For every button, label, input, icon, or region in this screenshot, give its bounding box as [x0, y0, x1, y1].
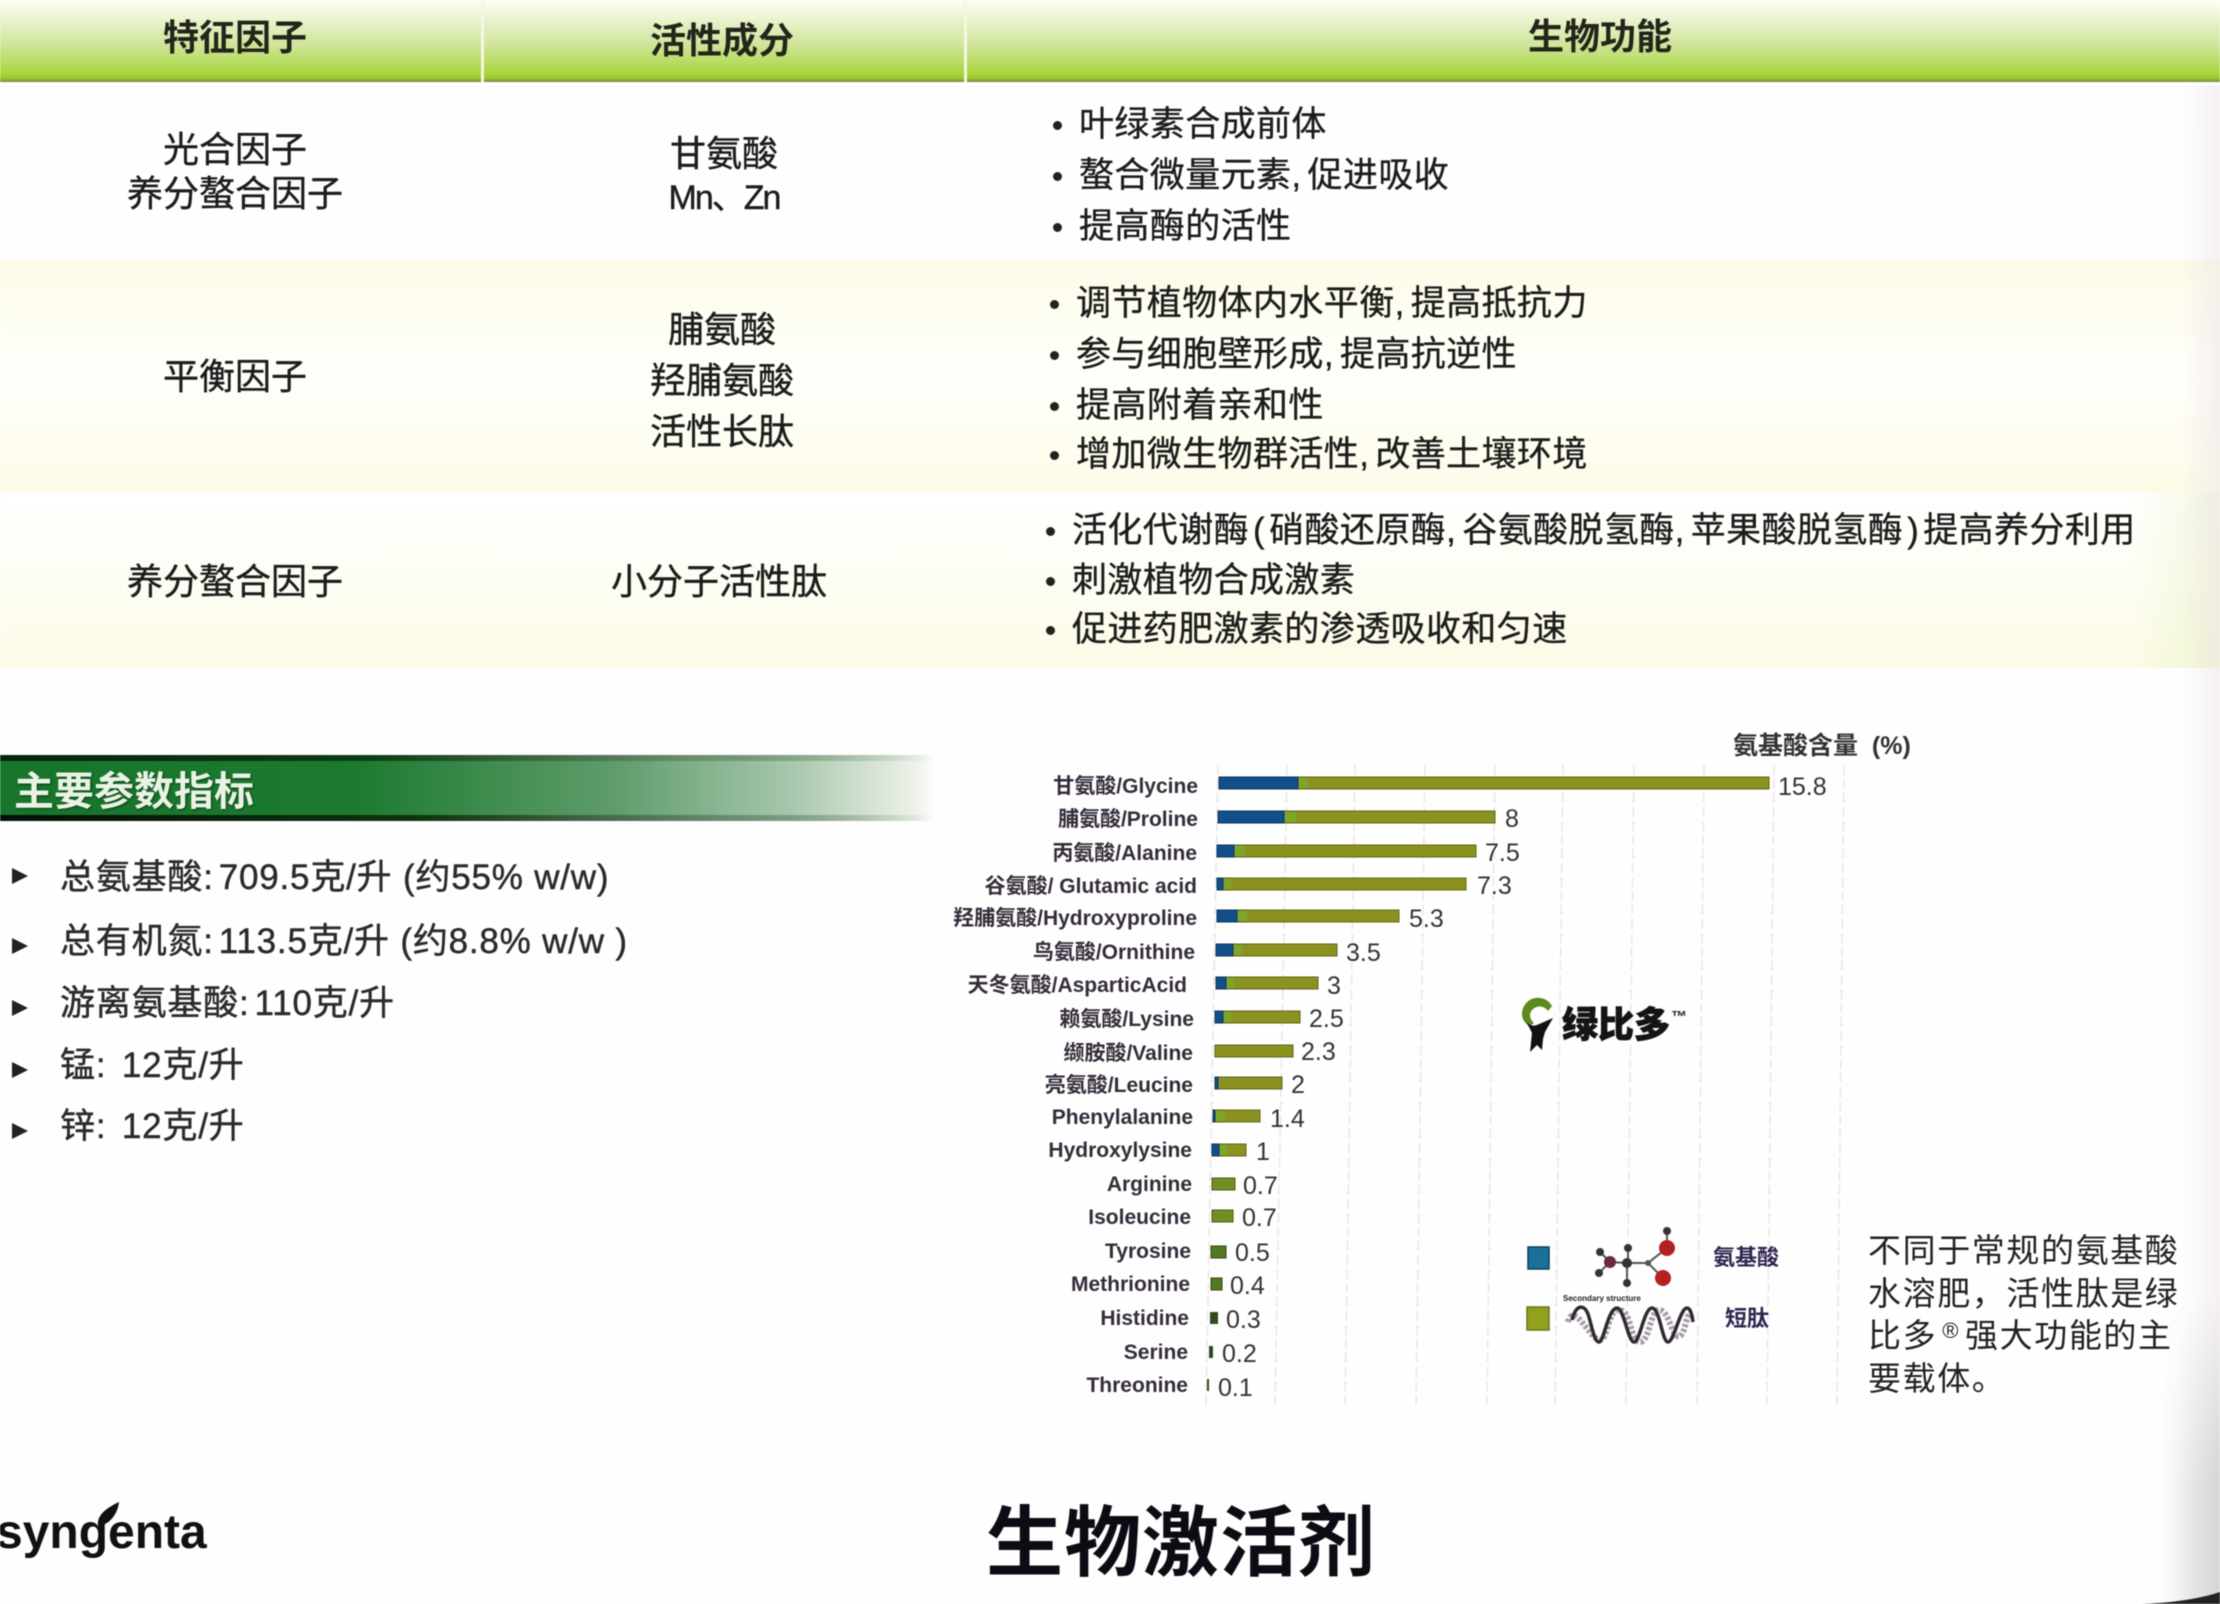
parameter: zinc: 锌: 12克/升	[60, 1107, 245, 1146]
row: Isoleucine	[1088, 1204, 1277, 1232]
row: Isoleucine: 0.7	[1242, 1204, 1277, 1232]
row: Arginine	[1107, 1172, 1278, 1200]
row 2 functions	[1049, 284, 1588, 474]
row: Proline: 脯氨酸/Proline	[1058, 807, 1198, 831]
row: Alanine: 丙氨酸/Alanine	[1052, 841, 1197, 865]
helix main strand	[1572, 1307, 1693, 1342]
row: Tyrosine	[1105, 1239, 1270, 1267]
row: Lysine: 2.5	[1309, 1005, 1344, 1033]
row: Threonine: 0.1	[1218, 1374, 1253, 1402]
row: Ornithine	[1033, 939, 1381, 967]
row: Hydroxyproline: 5.3	[1409, 905, 1444, 933]
key parameters list	[11, 858, 628, 1146]
row: Alanine	[1052, 839, 1520, 867]
note text block: 不同于常规的氨基酸	[1868, 1232, 2179, 1269]
row: Methrionine	[1071, 1272, 1265, 1300]
legend: amino acid	[1528, 1227, 1779, 1287]
row 2 background	[0, 260, 2220, 492]
note text block: 比多®强大功能的主	[1868, 1317, 2173, 1354]
logo icon: figure with green arc	[1522, 998, 1553, 1052]
parameter: total amino acids: 总氨基酸:709.5克/升 (约55% w/w)	[60, 858, 609, 897]
chart title: 氨基酸含量 (%)	[1733, 732, 1911, 760]
row: Phenylalanine	[1052, 1105, 1305, 1133]
row: Aspartic Acid	[968, 972, 1341, 1000]
brand logo	[1522, 998, 1687, 1052]
row: Arginine: 0.7	[1243, 1172, 1278, 1200]
row: Methrionine: 0.4	[1230, 1272, 1265, 1300]
logo text: 绿比多	[1562, 1004, 1670, 1045]
helix caption: Secondary structure	[1563, 1294, 1641, 1303]
row 2 factor: 平衡因子: 平衡因子	[163, 356, 307, 397]
row 3 ingredient: 小分子活性肽: 小分子活性肽	[611, 561, 827, 602]
row: Lysine	[1059, 1005, 1344, 1033]
row: Aspartic Acid: 3	[1327, 972, 1341, 1000]
label: 氨基酸: 氨基酸	[1713, 1245, 1779, 1270]
parameter: manganese: 锰: 12克/升	[60, 1046, 245, 1085]
row: Methrionine: Methrionine	[1071, 1273, 1190, 1296]
row: Proline	[1058, 805, 1519, 833]
row: Glycine	[1053, 773, 1827, 801]
page edge shadow	[2143, 85, 2220, 1604]
row: Phenylalanine: 1.4	[1270, 1105, 1305, 1133]
function bullet: 刺激植物合成激素	[1072, 561, 1355, 600]
row: Phenylalanine: Phenylalanine	[1052, 1106, 1193, 1129]
ingredient: 脯氨酸: 脯氨酸	[668, 309, 776, 350]
swatch: short peptide	[1527, 1307, 1549, 1330]
row: Hydroxyproline: 羟脯氨酸/Hydroxyproline	[953, 906, 1197, 930]
function bullet: 增加微生物群活性,改善土壤环境	[1076, 435, 1588, 474]
section heading bar: 主要参数指标	[0, 755, 935, 821]
row: Leucine: 2	[1291, 1071, 1305, 1099]
row: Threonine: Threonine	[1086, 1374, 1188, 1397]
function bullet: 活化代谢酶(硝酸还原酶,谷氨酸脱氢酶,苹果酸脱氢酶)提高养分利用	[1072, 511, 2136, 550]
function bullet: 参与细胞壁形成,提高抗逆性	[1076, 335, 1517, 374]
row: Proline: 8	[1505, 805, 1519, 833]
row 1 factor	[127, 129, 343, 214]
row: Lysine: 赖氨酸/Lysine	[1059, 1007, 1194, 1031]
factor: 养分螯合因子: 养分螯合因子	[127, 173, 343, 214]
helix secondary strand	[1568, 1310, 1692, 1342]
row: Glutamic acid	[985, 872, 1512, 900]
bottom corner grey shading	[2172, 1346, 2220, 1601]
note text block: 水溶肥，活性肽是绿	[1868, 1274, 2179, 1312]
row: Hydroxyproline	[953, 905, 1444, 933]
ingredient: Mn、Zn: Mn、Zn	[669, 179, 779, 217]
function bullet: 叶绿素合成前体	[1079, 105, 1327, 144]
row: Arginine: Arginine	[1107, 1173, 1192, 1196]
factor: 光合因子: 光合因子	[163, 129, 307, 170]
row: Histidine	[1100, 1306, 1261, 1334]
row: Tyrosine: Tyrosine	[1105, 1240, 1191, 1263]
ingredient: 甘氨酸: 甘氨酸	[670, 133, 778, 174]
function bullet: 促进药肥激素的渗透吸收和匀速	[1072, 610, 1568, 649]
row: Isoleucine: Isoleucine	[1088, 1206, 1191, 1229]
function bullet: 提高酶的活性	[1079, 207, 1291, 246]
row: Hydroxylysine: 1	[1256, 1138, 1270, 1166]
row 1 ingredient	[669, 133, 780, 217]
row: Hydroxylysine	[1048, 1138, 1270, 1166]
row: Ornithine: 鸟氨酸/Ornithine	[1033, 940, 1195, 964]
function bullet: 螯合微量元素,促进吸收	[1079, 156, 1449, 195]
right edge tint	[2180, 85, 2220, 1604]
icon: leaf on g	[97, 1502, 120, 1526]
swatch: amino acid	[1528, 1247, 1549, 1269]
row: Valine: 缬胺酸/Valine	[1063, 1042, 1193, 1065]
row: Alanine: 7.5	[1485, 839, 1520, 867]
main title: 生物激活剂	[986, 1501, 1376, 1587]
row: Ornithine: 3.5	[1346, 939, 1381, 967]
section heading bar: 主要参数指标: 主要参数指标	[14, 770, 254, 814]
header: 活性成分: 活性成分	[650, 20, 794, 61]
header divider 2	[964, 0, 967, 82]
legend: short peptide	[1527, 1294, 1769, 1342]
note text block	[1868, 1232, 2179, 1396]
row: Hydroxylysine: Hydroxylysine	[1048, 1139, 1192, 1162]
row: Glutamic acid: 7.3	[1477, 872, 1512, 900]
note text block: 要载体。	[1868, 1360, 2006, 1396]
row: Aspartic Acid: 天冬氨酸/AsparticAcid	[968, 973, 1187, 997]
row 2 ingredients	[650, 309, 794, 452]
row 3 factor: 养分螯合因子: 养分螯合因子	[127, 561, 343, 602]
header: 生物功能: 生物功能	[1528, 16, 1672, 57]
heading bar bottom edge	[0, 815, 935, 821]
row 3 background	[0, 492, 2220, 668]
label: 短肽: 短肽	[1725, 1306, 1769, 1331]
row: Leucine	[1045, 1071, 1305, 1099]
ingredient: 活性长肽: 活性长肽	[650, 411, 794, 452]
row: Threonine	[1086, 1374, 1253, 1402]
row 3 functions	[1045, 511, 2136, 649]
row: Tyrosine: 0.5	[1235, 1239, 1270, 1267]
heading bar top edge	[0, 755, 935, 761]
parameter: free amino acids: 游离氨基酸:110克/升	[60, 984, 395, 1023]
row: Valine	[1063, 1038, 1336, 1066]
header: 特征因子: 特征因子	[163, 17, 307, 58]
row: Histidine: Histidine	[1100, 1307, 1189, 1330]
row: Leucine: 亮氨酸/Leucine	[1045, 1073, 1193, 1097]
icon: amino acid molecule	[1595, 1227, 1675, 1287]
header divider 1	[481, 0, 484, 82]
function bullet: 提高附着亲和性	[1076, 386, 1324, 425]
icon: peptide helix	[1563, 1294, 1693, 1342]
parameter: total organic nitrogen: 总有机氮:113.5克/升 (约8.8% w/w )	[60, 922, 628, 961]
header band	[0, 0, 2220, 82]
row: Serine	[1124, 1340, 1257, 1368]
function bullet: 调节植物体内水平衡,提高抵抗力	[1076, 284, 1588, 323]
row: Glutamic acid: 谷氨酸/ Glutamic acid	[985, 874, 1197, 898]
row: Glycine: 15.8	[1778, 773, 1827, 801]
ingredient: 羟脯氨酸: 羟脯氨酸	[650, 360, 794, 401]
bottom corner dark sliver	[2143, 1592, 2220, 1604]
syngenta logo: syngenta	[0, 1506, 207, 1559]
row 1 functions	[1052, 105, 1449, 246]
trademark: ™	[1671, 1009, 1687, 1026]
row: Glycine: 甘氨酸/Glycine	[1053, 774, 1198, 798]
row: Serine: 0.2	[1222, 1340, 1257, 1368]
row: Histidine: 0.3	[1226, 1306, 1261, 1334]
row: Valine: 2.3	[1301, 1038, 1336, 1066]
row: Serine: Serine	[1124, 1341, 1188, 1364]
